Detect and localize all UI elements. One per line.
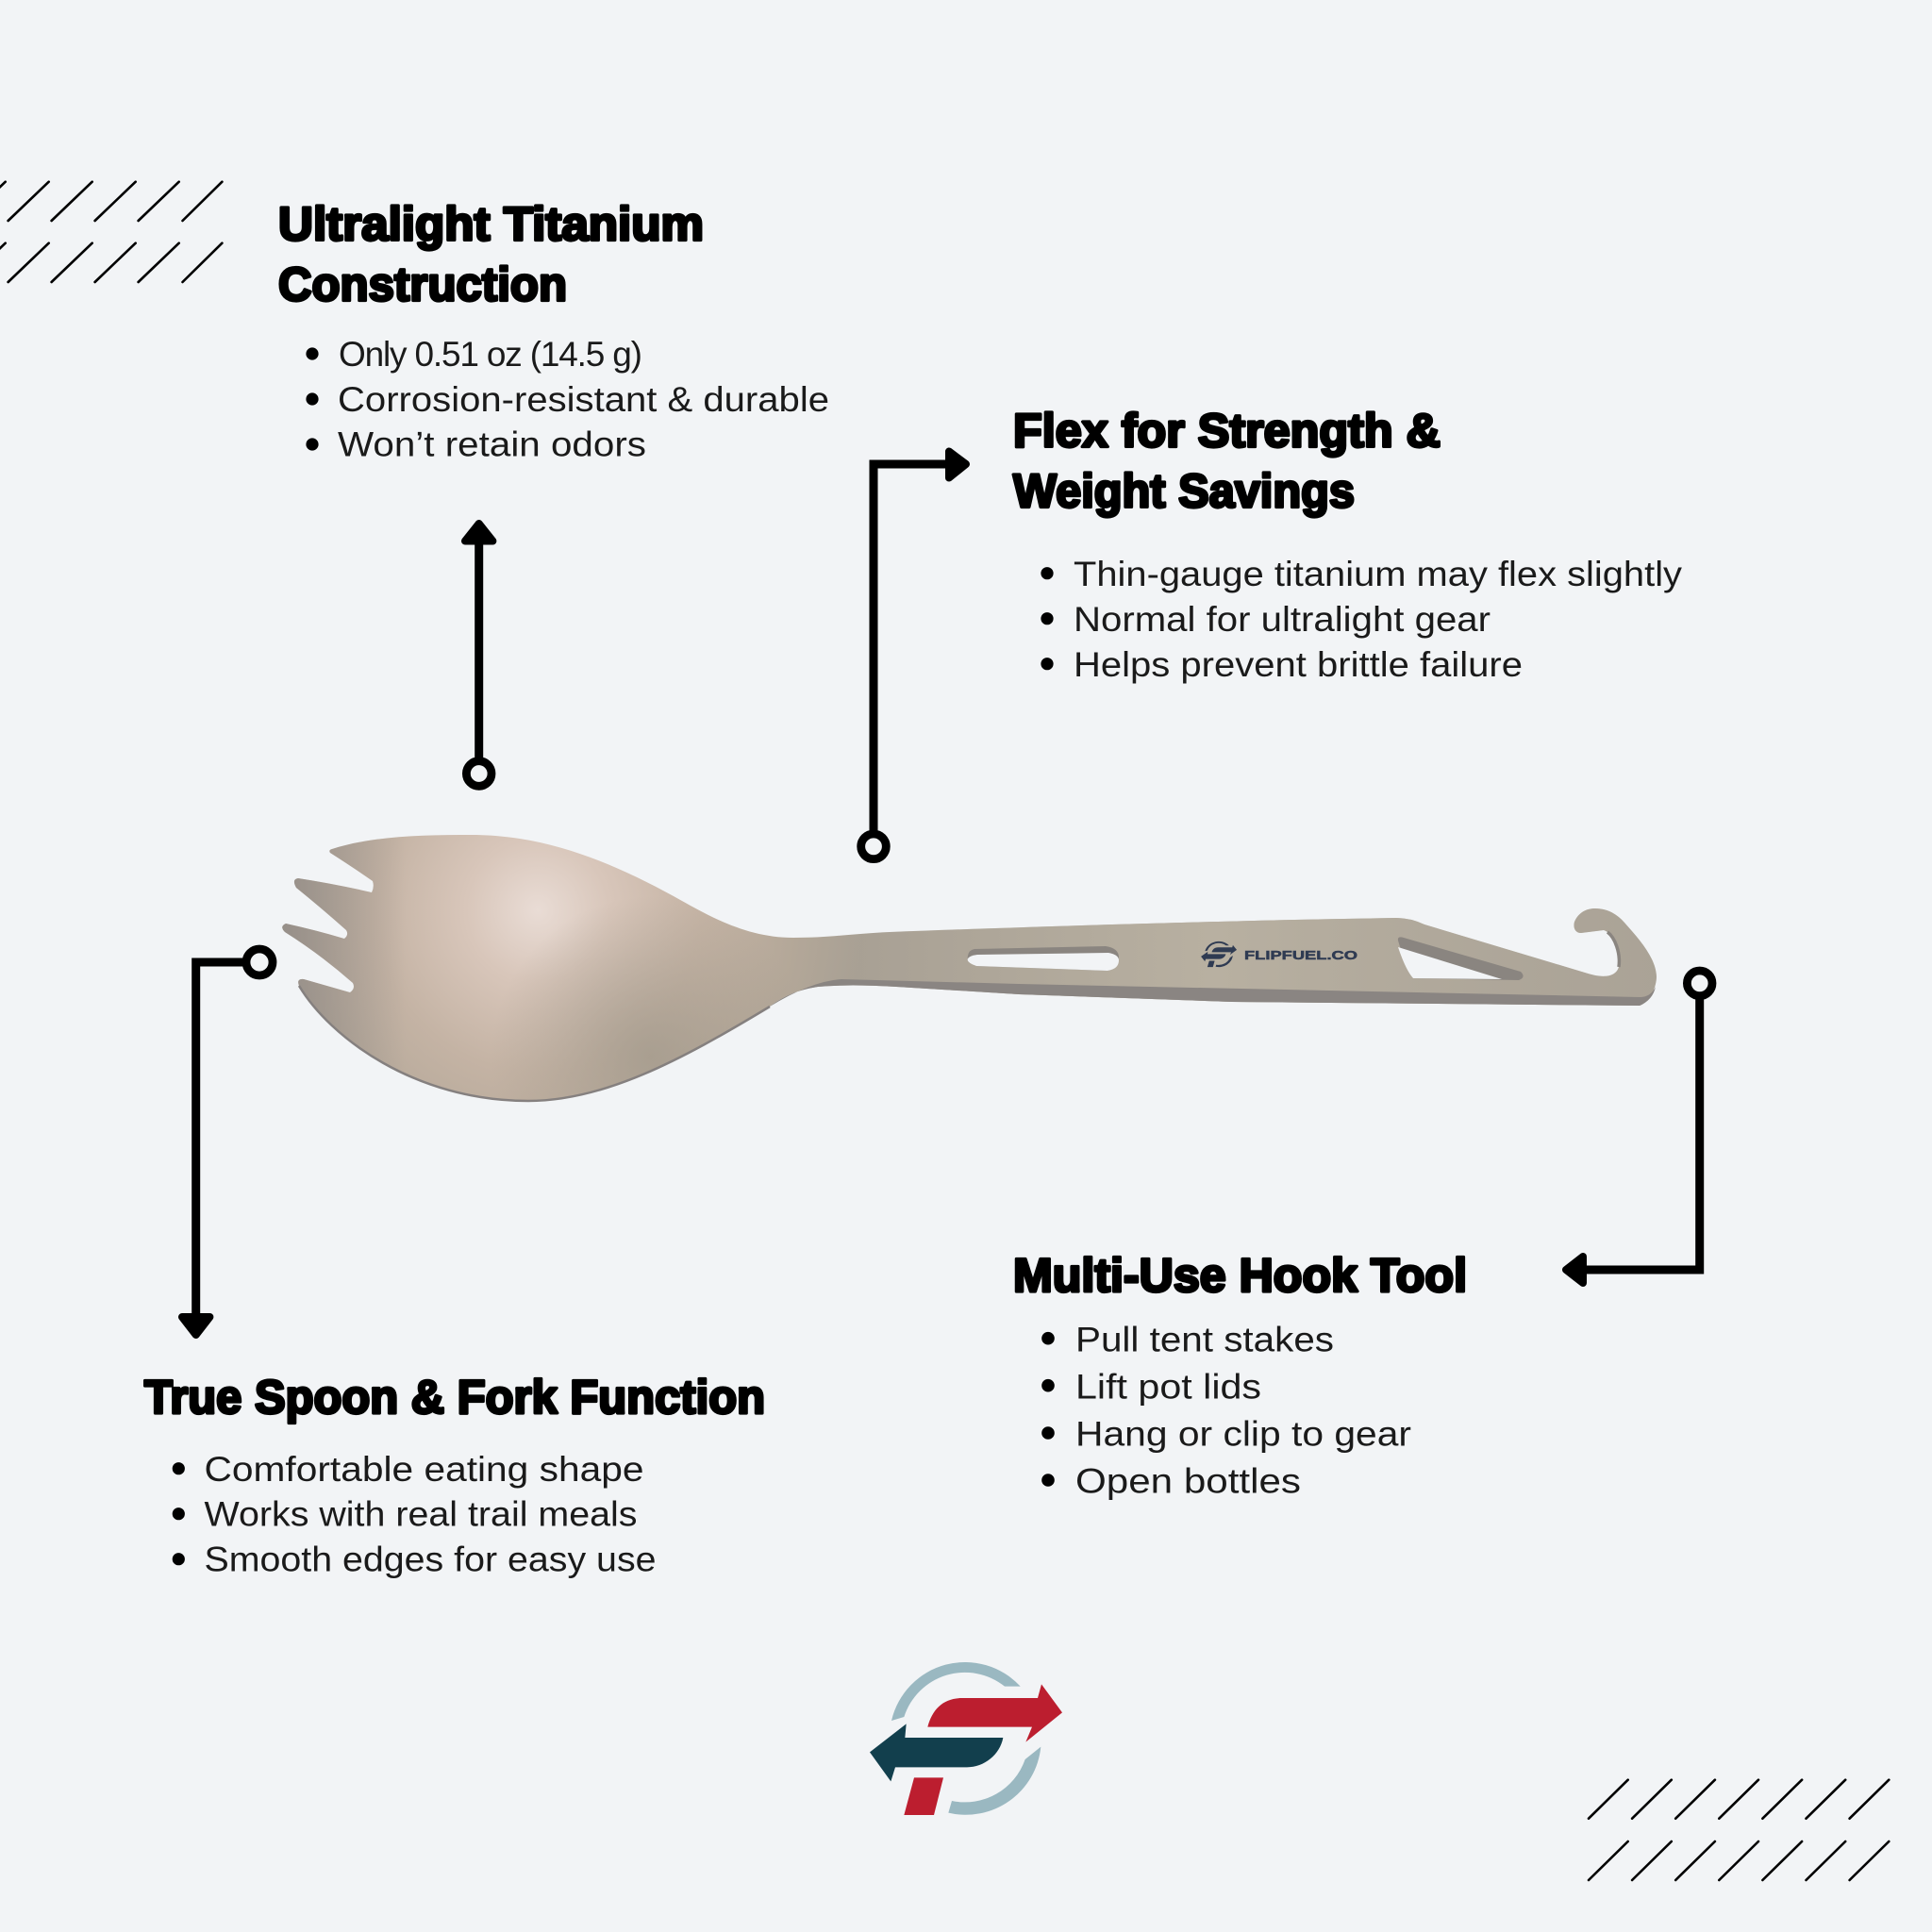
panel: ultralight titanium construction	[278, 198, 829, 464]
handle slot	[968, 946, 1119, 971]
bullet list: hook: Lift pot lids	[1075, 1367, 1261, 1406]
bullet list: flex: Thin-gauge titanium may flex slightly	[1074, 555, 1683, 593]
engraved brand logo: FLIPFUEL.CO	[1244, 948, 1357, 962]
bullet list: spoon and fork	[173, 1450, 656, 1579]
heading: flex for strength: Flex for Strength &	[1013, 404, 1441, 457]
bullet list: hook	[1041, 1321, 1411, 1501]
bullet list: flex	[1041, 555, 1683, 684]
engraved brand logo	[1201, 941, 1357, 967]
panel: flex for strength	[1013, 404, 1683, 684]
bullet list: flex: Normal for ultralight gear	[1074, 600, 1491, 639]
heading: ultralight titanium: Construction	[278, 258, 567, 311]
heading: ultralight titanium: Ultralight Titanium	[278, 198, 704, 251]
handle highlight	[282, 835, 1657, 1101]
bullet list: flex: Helps prevent brittle failure	[1074, 645, 1523, 684]
bullet list: titanium: Corrosion-resistant & durable	[338, 380, 829, 419]
bullet list: titanium: Won’t retain odors	[338, 425, 646, 464]
arrow: up to titanium	[465, 524, 492, 786]
heading: flex for strength: Weight Savings	[1013, 464, 1355, 517]
spork photo illustration	[282, 835, 1657, 1101]
bullet list: titanium	[306, 335, 829, 464]
arrow: to spoon and fork	[182, 949, 273, 1335]
logo ring: bottom arc	[948, 1747, 1041, 1815]
spork body and handle	[282, 835, 1657, 1101]
bullet list: hook: Pull tent stakes	[1075, 1321, 1334, 1359]
decorative slashes: bottom right	[1589, 1780, 1889, 1880]
bullet list: spoon and fork: Comfortable eating shape	[204, 1450, 643, 1489]
heading: ultralight titanium	[278, 198, 704, 311]
bullet list: spoon and fork: Smooth edges for easy use	[204, 1541, 657, 1579]
arrow: to flex	[861, 451, 966, 859]
decorative slashes: top left	[0, 182, 222, 282]
logo red stem	[904, 1777, 943, 1815]
logo ring: top arc	[891, 1662, 1021, 1721]
hook inner rim	[1607, 932, 1619, 967]
logo dark arrow	[870, 1724, 1003, 1781]
bullet list: spoon and fork: Works with real trail meals	[204, 1495, 638, 1534]
bullet list: hook: Hang or clip to gear	[1075, 1415, 1411, 1454]
heading: true spoon and fork function: True Spoon & Fork Function	[144, 1371, 765, 1424]
brand logo	[870, 1662, 1062, 1815]
bullet list: titanium: Only 0.51 oz (14.5 g)	[339, 335, 642, 374]
heading: flex for strength	[1013, 404, 1441, 517]
bullet list: hook: Open bottles	[1075, 1462, 1301, 1501]
panel: true spoon and fork function	[144, 1371, 765, 1579]
handle triangle cutout	[1398, 937, 1524, 980]
panel: multi-use hook tool	[1013, 1249, 1467, 1501]
arrow: to hook	[1566, 971, 1712, 1283]
tine shading	[282, 835, 1657, 1101]
spork underside rim	[770, 979, 1656, 1007]
logo red arrow	[927, 1684, 1062, 1742]
lower bowl shading	[282, 835, 1657, 1101]
heading: multi-use hook tool: Multi-Use Hook Tool	[1013, 1249, 1467, 1302]
spork bottom edge	[299, 986, 770, 1101]
